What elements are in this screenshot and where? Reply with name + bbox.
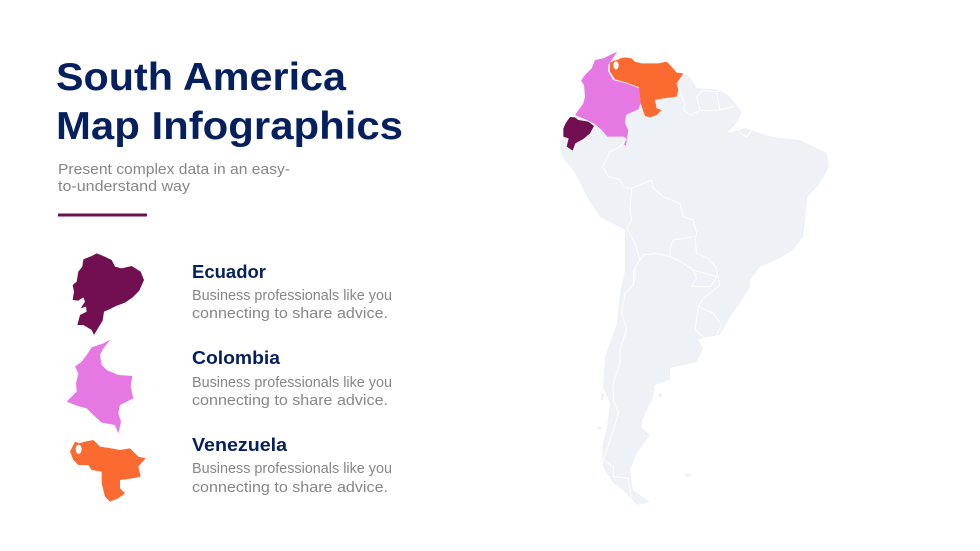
text block: Ecuador: Business professionals like you <box>192 287 392 304</box>
icon: Ecuador shape <box>73 253 144 335</box>
text block: Venezuela: Venezuela <box>192 435 288 455</box>
text block: Venezuela: connecting to share advice. <box>192 479 388 496</box>
divider <box>58 214 147 216</box>
highlighted country: Venezuela <box>610 57 683 117</box>
text block: Ecuador <box>192 262 392 322</box>
continent landmass <box>560 73 829 505</box>
country borders north <box>603 88 753 280</box>
map: South America <box>560 52 829 505</box>
highlighted country: Ecuador <box>563 117 594 151</box>
text block: Ecuador: connecting to share advice. <box>192 305 388 322</box>
subtitle: Present complex data in an easy- <box>58 161 290 178</box>
islands <box>596 393 693 477</box>
subtitle <box>58 161 290 195</box>
country borders south <box>603 270 722 500</box>
text block: Colombia: connecting to share advice. <box>192 392 388 409</box>
text block: Ecuador: Ecuador <box>192 262 266 282</box>
text block: Colombia: Colombia <box>192 348 281 368</box>
title: Map Infographics <box>56 105 403 148</box>
subtitle: to-understand way <box>58 178 191 195</box>
icon: Colombia shape <box>67 339 133 433</box>
icon: Venezuela shape <box>70 440 146 502</box>
highlighted country: Colombia <box>575 52 641 146</box>
text block: Venezuela: Business professionals like you <box>192 460 392 477</box>
title: South America <box>56 56 346 99</box>
text block: Venezuela <box>192 435 392 496</box>
text block: Colombia: Business professionals like you <box>192 374 392 391</box>
title <box>56 56 403 148</box>
text block: Colombia <box>192 348 392 409</box>
